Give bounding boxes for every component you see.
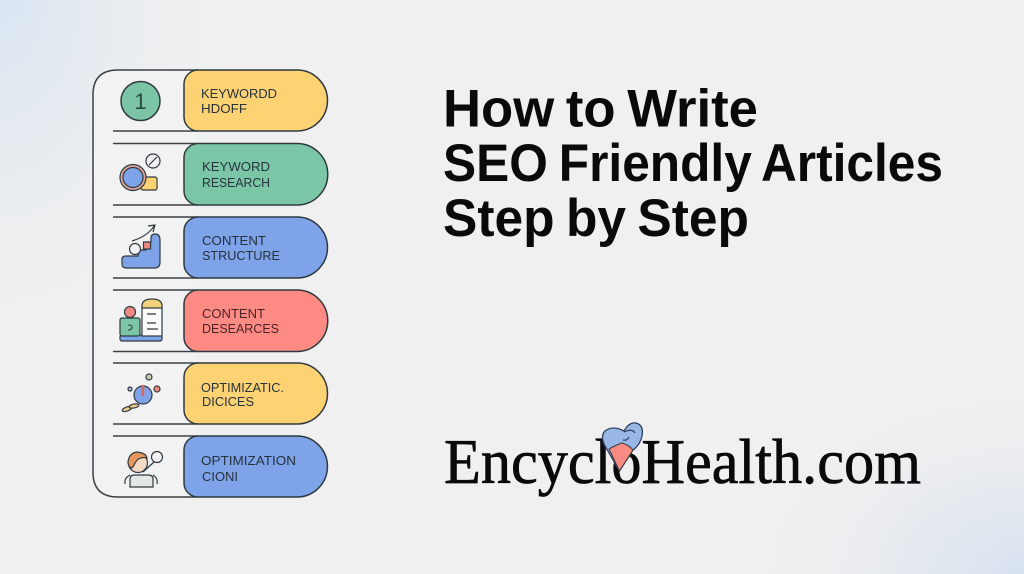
pill: optimization cioni — [184, 436, 327, 497]
icon: person with speech bubble — [125, 452, 162, 487]
panel: steps list — [93, 70, 328, 497]
pill: optimization cioni: OPTIMIZATION — [201, 453, 296, 468]
pill: optimizatic dicices — [184, 363, 327, 424]
step 1: keyword hdoff — [121, 70, 327, 131]
pill: content structure — [184, 217, 327, 278]
pill: keyword research — [184, 144, 328, 205]
pill: keyword hdoff: HDOFF — [201, 101, 247, 116]
step 2: keyword research — [120, 144, 328, 205]
title: SEO Friendly Articles — [443, 134, 943, 193]
pill: content desearces: DESEARCES — [202, 321, 279, 336]
pill: keyword hdoff — [184, 70, 327, 131]
icon: gauge and coins — [122, 374, 160, 413]
icon: stairs and arrow — [122, 225, 160, 268]
wordmark: EncycloHealth.com — [444, 427, 921, 497]
title: Step by Step — [443, 189, 749, 248]
step 5: optimizatic dicices — [122, 363, 327, 424]
pill: keyword hdoff: KEYWORDD — [201, 86, 277, 101]
step 4: content desearces — [120, 290, 328, 352]
icon: number one badge: 1 — [134, 89, 147, 114]
logo: EncycloHealth.com — [444, 423, 921, 497]
title — [443, 80, 943, 248]
pill: optimizatic dicices: DICICES — [202, 394, 254, 409]
icon: magnifier — [120, 154, 160, 190]
step 3: content structure — [122, 217, 327, 278]
icon: heart — [602, 423, 642, 471]
pill: content desearces — [184, 290, 328, 352]
pill: optimization cioni: CIONI — [202, 469, 238, 484]
pill: keyword research: RESEARCH — [202, 175, 270, 190]
pill: optimizatic dicices: OPTIMIZATIC. — [201, 380, 284, 395]
icon: person and document — [120, 299, 162, 341]
pill: content structure: CONTENT — [202, 233, 266, 248]
step 6: optimization cioni — [125, 436, 327, 497]
title: How to Write — [443, 80, 758, 138]
pill: content structure: STRUCTURE — [202, 248, 280, 263]
pill: content desearces: CONTENT — [202, 306, 265, 321]
pill: keyword research: KEYWORD — [202, 159, 270, 174]
icon: number one badge — [121, 82, 160, 120]
